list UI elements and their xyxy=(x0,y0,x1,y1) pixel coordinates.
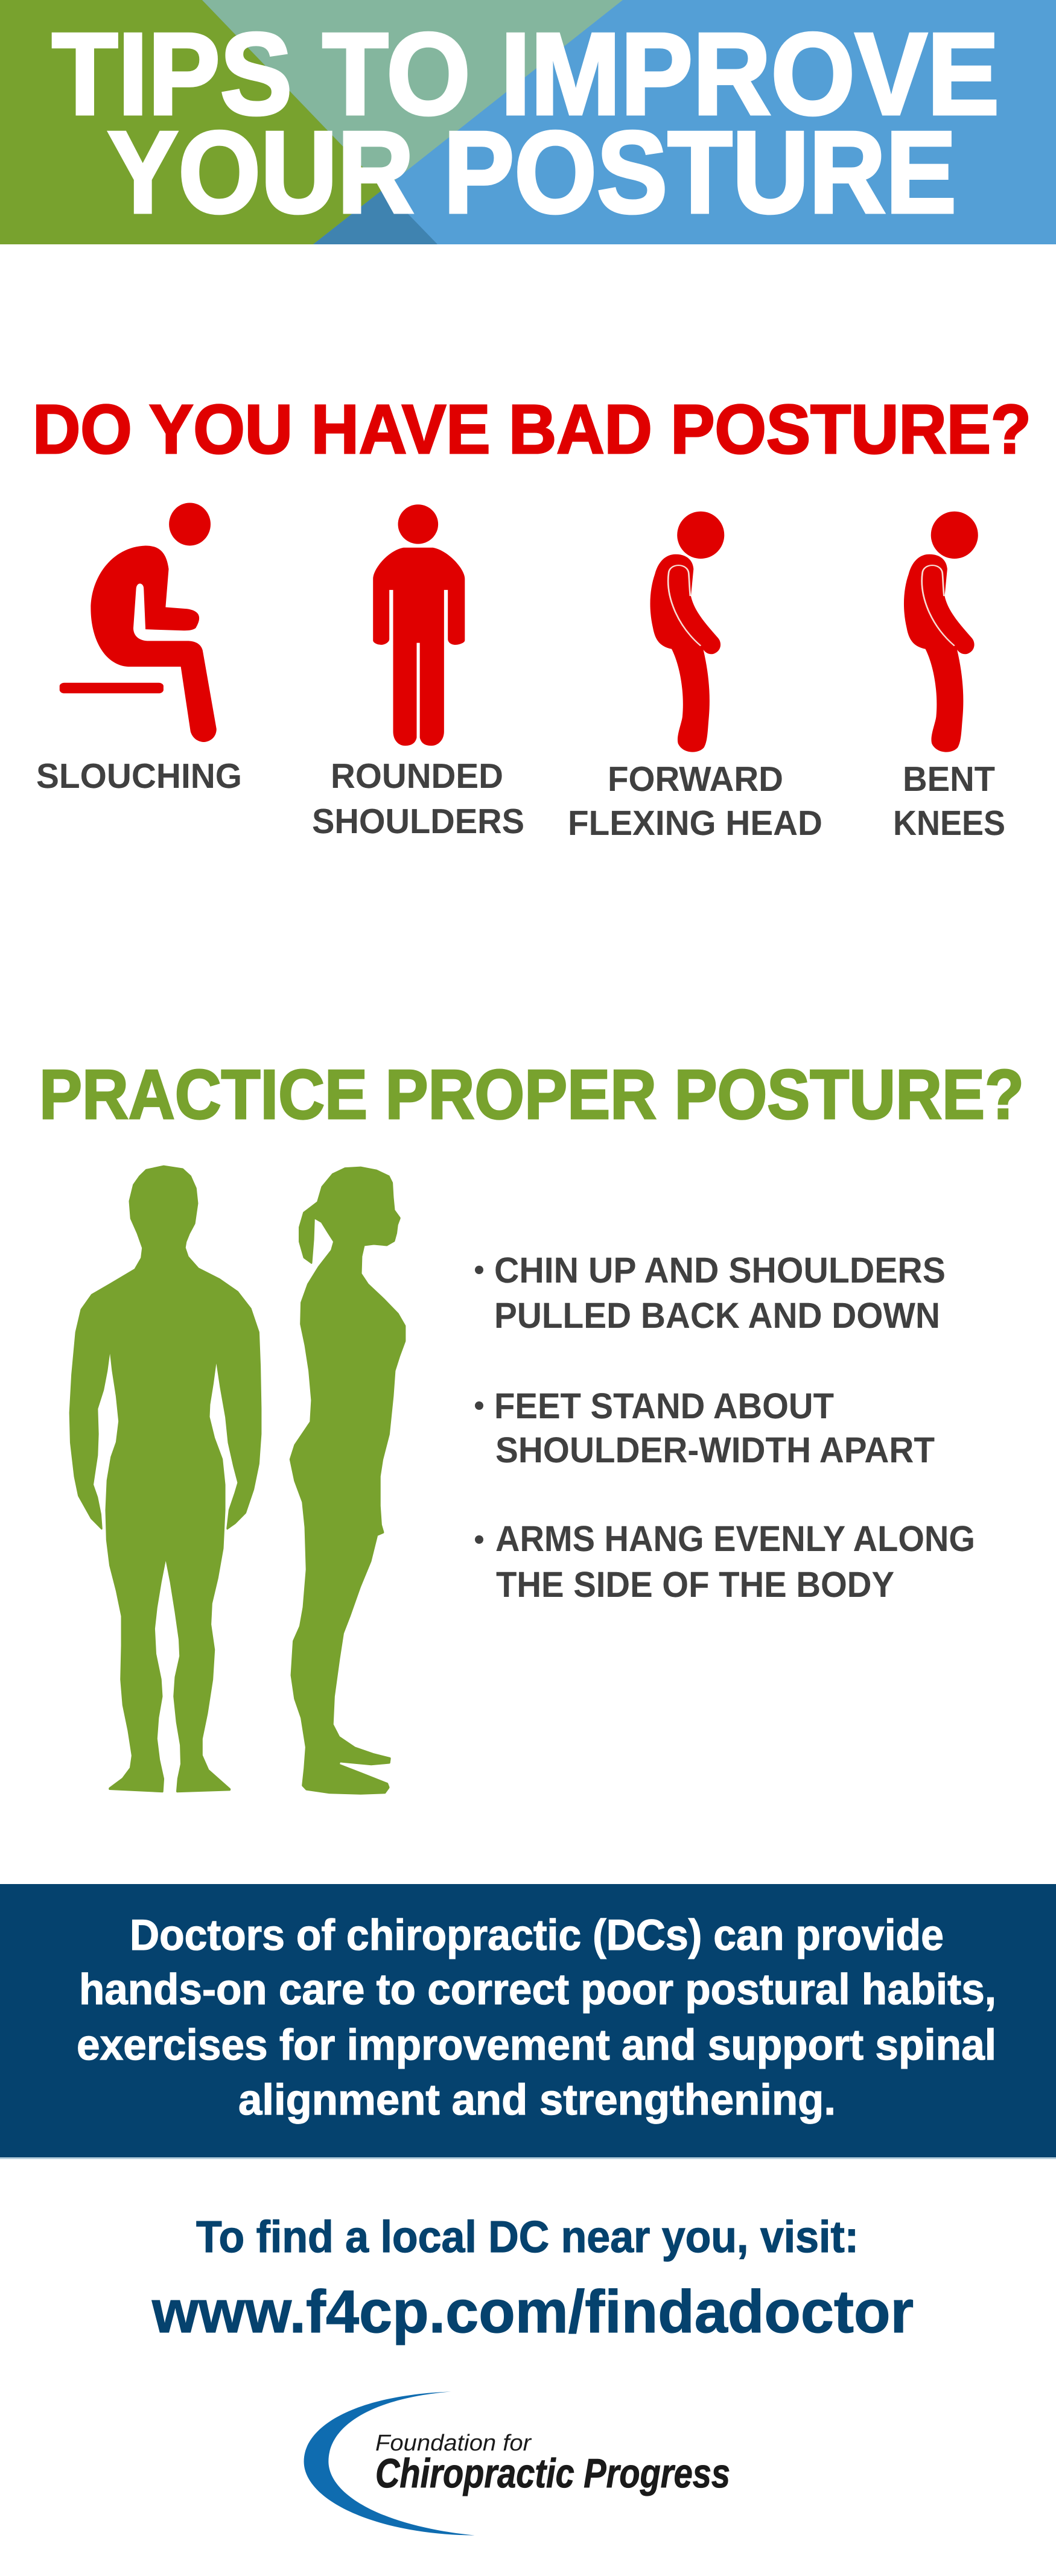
footer: find a doctor xyxy=(151,2212,914,2346)
callout text: Doctors of chiropractic (DCs) can provide xyxy=(130,1911,944,1959)
footer: find a doctor: www.f4cp.com/findadoctor xyxy=(151,2278,914,2346)
callout text: exercises for improvement and support spinal xyxy=(77,2021,996,2069)
heading: do you have bad posture: DO YOU HAVE BAD POSTURE? xyxy=(33,391,1031,468)
label: bent knees xyxy=(893,760,1005,843)
bullet list: posture tips: SHOULDER-WIDTH APART xyxy=(495,1430,935,1470)
callout text: hands-on care to correct poor postural habits, xyxy=(79,1965,996,2014)
title xyxy=(52,8,999,237)
logo: foundation for chiropractic progress xyxy=(304,2391,730,2536)
icon: female side silhouette xyxy=(290,1168,405,1794)
label: rounded shoulders: SHOULDERS xyxy=(312,802,524,841)
panel: bad posture figures xyxy=(36,503,1005,843)
bullet list: posture tips: FEET STAND ABOUT xyxy=(494,1386,834,1426)
callout text xyxy=(77,1911,996,2124)
label: bent knees: KNEES xyxy=(893,804,1005,843)
icon: logo crescent xyxy=(304,2391,475,2536)
bullet list: posture tips: PULLED BACK AND DOWN xyxy=(494,1295,940,1336)
label: slouching: SLOUCHING xyxy=(36,757,242,796)
label: bent knees: BENT xyxy=(903,760,995,799)
label: rounded shoulders xyxy=(312,757,524,841)
callout band: doctors of chiropractic xyxy=(0,1884,1056,2159)
logo wordmark: Chiropractic Progress xyxy=(375,2451,730,2496)
bullet list: posture tips: CHIN UP AND SHOULDERS xyxy=(494,1250,946,1290)
callout text: alignment and strengthening. xyxy=(238,2076,836,2124)
footer: find a doctor: To find a local DC near you, visit: xyxy=(196,2212,859,2262)
bullet list: posture tips: ARMS HANG EVENLY ALONG xyxy=(495,1518,975,1559)
icon: slouching figure xyxy=(60,503,217,742)
icon: rounded shoulders figure xyxy=(373,504,465,746)
label: forward flexing head xyxy=(568,760,822,843)
bullet list: posture tips xyxy=(475,1250,975,1605)
logo wordmark xyxy=(375,2431,730,2496)
label: rounded shoulders: ROUNDED xyxy=(331,757,503,796)
header banner xyxy=(0,0,1056,244)
label: forward flexing head: FORWARD xyxy=(608,760,783,799)
icon: forward flexing head figure xyxy=(650,512,724,752)
icon: bent knees figure xyxy=(904,512,978,752)
icon: male front silhouette xyxy=(70,1167,261,1791)
panel: proper posture xyxy=(70,1167,975,1794)
label: forward flexing head: FLEXING HEAD xyxy=(568,804,822,843)
bullet list: posture tips: THE SIDE OF THE BODY xyxy=(496,1564,894,1605)
title: TIPS TO IMPROVE xyxy=(52,8,999,139)
logo wordmark: Foundation for xyxy=(375,2431,532,2456)
title: YOUR POSTURE xyxy=(107,107,956,237)
